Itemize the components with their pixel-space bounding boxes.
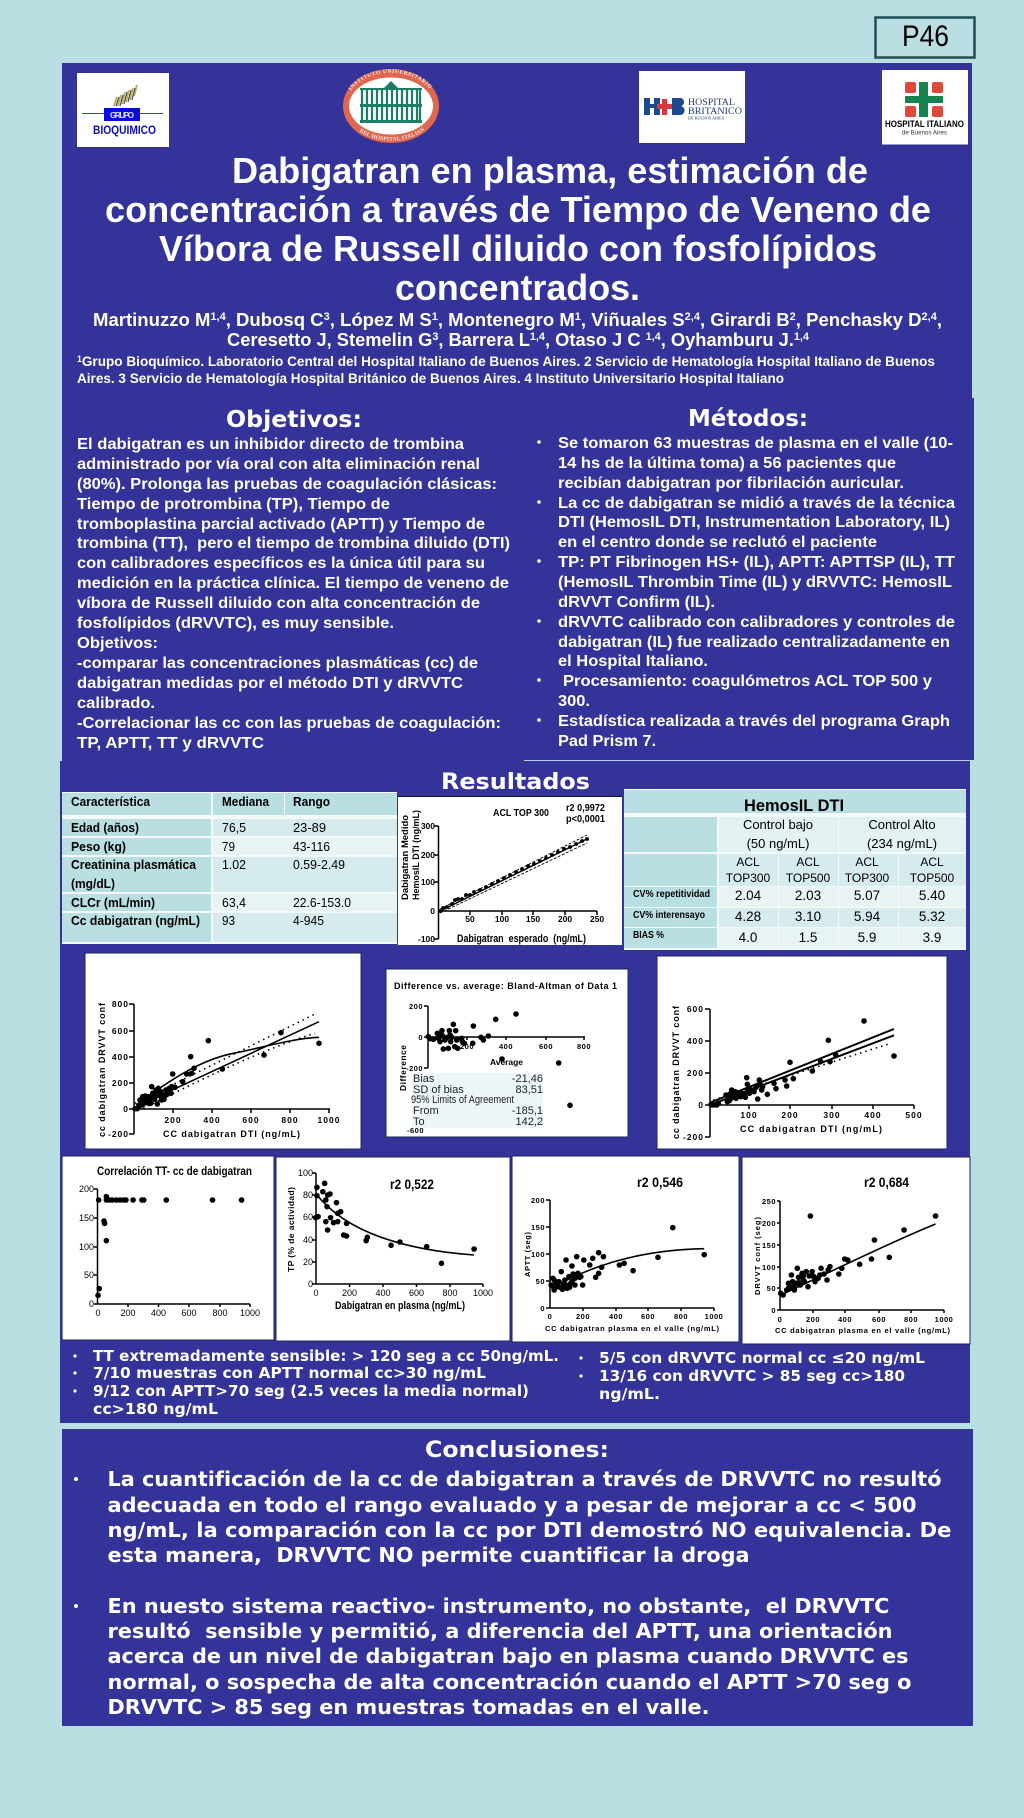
affiliations: Aires. 3 Servicio de Hematología Hospital Británico de Buenos Aires. 4 Instituto Universitario Hospital Italiano [77, 370, 784, 386]
table: HemosIL DTI: Control Alto [868, 817, 936, 832]
table: patient characteristics: 43-116 [293, 839, 330, 854]
authors: 2,4 [922, 311, 938, 323]
authors: 1,4 [646, 331, 662, 343]
text: objetivos body: (80%). Prolonga las pruebas de coagulación clásicas: [77, 476, 497, 493]
text: metodos bullets: Pad Prism 7. [558, 733, 656, 750]
title: Víbora de Russell diluido con fosfolípidos [159, 228, 877, 269]
chart: Bland-Altman: 200 [460, 1042, 474, 1051]
chart: TT correlation: 800 [212, 1308, 228, 1318]
table: HemosIL DTI: ACL [855, 855, 879, 869]
chart: APTT vs dabigatran: 50 [536, 1277, 545, 1286]
logo: Hospital Britanico: BRITANICO [688, 107, 742, 117]
chart: DRVVT vs DTI up to 500: cc dabigatran DRVVT conf [671, 1005, 681, 1139]
chart: TP vs dabigatran: 100 [298, 1168, 313, 1178]
text: objetivos body: víbora de Russell diluido con alta concentración de [77, 595, 480, 612]
table: patient characteristics: Peso (kg) [71, 839, 126, 854]
text: results bullets right: 13/16 con dRVVTC > 85 seg cc>180 [599, 1367, 905, 1385]
text: conclusion 2: normal, o sospecha de alta concentración cuando el APTT >70 seg o [108, 1670, 911, 1694]
chart: DRVVT conf vs dabigatran: r2 0,684 [864, 1174, 909, 1190]
authors: , Viñuales S [581, 309, 685, 330]
chart: TT correlation: 600 [181, 1308, 197, 1318]
table: patient characteristics: Rango [293, 794, 330, 809]
chart: DRVVT conf vs dabigatran: 100 [762, 1263, 776, 1272]
text: objetivos body: -Correlacionar las cc con las pruebas de coagulación: [77, 715, 501, 732]
authors: , [937, 309, 942, 330]
authors: Ceresetto J, Stemelin G [227, 329, 435, 350]
logo: Grupo Bioquimico: GRUPO [110, 111, 134, 120]
text: conclusion 1: La cuantificación de la cc de dabigatran a través de DRVVTC no resultó [108, 1467, 942, 1491]
chart: APTT vs dabigatran: 0 [540, 1304, 545, 1313]
chart: TT correlation: 100 [79, 1242, 94, 1252]
table: patient characteristics: 23-89 [293, 820, 326, 835]
chart: Bland-Altman: -200 [406, 1064, 423, 1073]
chart: ACL TOP 300 calibration: 200 [421, 850, 435, 860]
logo: Instituto Universitario [343, 69, 439, 143]
table: patient characteristics: Creatinina plasmática [71, 857, 197, 872]
authors: , Oyhamburu J. [661, 329, 794, 350]
table: patient characteristics: 63,4 [222, 895, 246, 910]
panel: conclusiones [62, 1429, 973, 1726]
logo: Grupo Bioquimico: BIOQUIMICO [93, 123, 156, 137]
authors: 2,4 [685, 311, 701, 323]
poster code badge: P46 [902, 20, 949, 53]
chart: DRVVT vs DTI full range: 800 [281, 1115, 299, 1125]
table: HemosIL DTI: ACL [920, 855, 944, 869]
table: patient characteristics: 1.02 [222, 857, 246, 872]
chart: TT correlation: 0 [89, 1299, 94, 1309]
authors: 1 [432, 311, 438, 323]
chart: Bland-Altman: 400 [499, 1042, 513, 1051]
text: conclusion 1: ng/mL, la comparación con la cc por DTI demostró NO equivalencia. De [108, 1518, 952, 1542]
chart: DRVVT conf vs dabigatran: 400 [838, 1315, 852, 1324]
chart: DRVVT conf vs dabigatran: 200 [762, 1219, 776, 1228]
table: patient characteristics [62, 792, 397, 944]
chart: DRVVT vs DTI up to 500: 200 [781, 1110, 799, 1120]
text: results bullets left: 9/12 con APTT>70 seg (2.5 veces la media normal) [93, 1382, 529, 1400]
logo: Hospital Italiano [882, 70, 968, 144]
table: Bland-Altman statistics [411, 1073, 543, 1128]
authors: , Girardi B [700, 309, 790, 330]
chart: DRVVT vs DTI full range: 1000 [318, 1115, 340, 1125]
chart: TP vs dabigatran: 400 [375, 1288, 391, 1298]
chart: TP vs dabigatran: 0 [308, 1279, 313, 1289]
chart: TP vs dabigatran: TP (% de actividad) [286, 1187, 296, 1272]
text: objetivos body: calibrado. [77, 695, 155, 712]
text: metodos bullets: Se tomaron 63 muestras de plasma en el valle (10- [558, 435, 953, 452]
logo: Hospital Italiano: HOSPITAL ITALIANO [885, 119, 964, 129]
chart: APTT vs dabigatran: 600 [641, 1312, 655, 1321]
chart: TT correlation: 200 [120, 1308, 136, 1318]
logo: Instituto Universitario: INSTITUTO UNIVERSITARIO [348, 69, 432, 91]
table: HemosIL DTI: CV% interensayo [633, 910, 705, 921]
chart: DRVVT conf vs dabigatran: 50 [767, 1284, 776, 1293]
chart: TT correlation: 200 [79, 1184, 94, 1194]
chart: DRVVT conf vs dabigatran: 150 [762, 1241, 776, 1250]
table: HemosIL DTI [624, 789, 966, 950]
text: metodos bullets: DTI (HemosIL DTI, Instrumentation Laboratory, IL) [558, 514, 950, 531]
chart: APTT vs dabigatran: 400 [609, 1312, 623, 1321]
chart: ACL TOP 300 calibration: 100 [495, 914, 509, 924]
text: metodos bullets [537, 435, 956, 750]
text: objetivos body [77, 436, 510, 752]
chart: ACL TOP 300 calibration: HemosIL DTI (ng/mL) [411, 810, 421, 900]
table: HemosIL DTI: 3.9 [923, 930, 941, 945]
chart: APTT vs dabigatran: CC dabigatran plasma en el valle (ng/mL) [545, 1324, 720, 1333]
text: metodos bullets: (HemosIL Thrombin Time (IL) y dRVVTC: HemosIL [558, 574, 952, 591]
chart: ACL TOP 300 calibration: Dabigatran esperado (ng/mL) [457, 933, 586, 945]
logo: Hospital Italiano: de Buenos Aires [902, 130, 947, 136]
text: metodos bullets: el Hospital Italiano. [558, 653, 708, 670]
text: objetivos body: TP, APTT, TT y dRVVTC [77, 735, 264, 752]
authors: 2 [790, 311, 796, 323]
table: patient characteristics: 22.6-153.0 [293, 895, 351, 910]
table: HemosIL DTI: 1.5 [799, 930, 817, 945]
text: conclusion 1 [74, 1467, 952, 1567]
text: metodos bullets: dabigatran (IL) fue realizado centralizadamente en [558, 634, 950, 651]
chart: TP vs dabigatran: r2 0,522 [390, 1176, 434, 1192]
affiliations: Grupo Bioquímico. Laboratorio Central del Hospital Italiano de Buenos Aires. 2 Servicio de Hematología Hospital Italiano de Buenos [82, 353, 935, 369]
text: metodos bullets: Estadística realizada a través del programa Graph [558, 713, 950, 730]
chart: DRVVT vs DTI up to 500: 600 [687, 1004, 704, 1014]
table: HemosIL DTI: 3.10 [795, 909, 821, 924]
chart: TT correlation: 0 [95, 1308, 101, 1318]
chart: DRVVT vs DTI full range [85, 953, 361, 1149]
authors: , López M S [330, 309, 432, 330]
chart: ACL TOP 300 calibration: 0 [430, 906, 435, 916]
text: objetivos body: dabigatran medidas por el método DTI y dRVVTC [77, 675, 463, 692]
authors: Martinuzzo M [93, 309, 210, 330]
chart: TP vs dabigatran: 60 [303, 1212, 313, 1222]
table: HemosIL DTI: Control bajo [743, 817, 813, 832]
table: patient characteristics: 76,5 [222, 820, 246, 835]
chart: APTT vs dabigatran: 200 [531, 1196, 545, 1205]
authors: 1,4 [794, 331, 810, 343]
affiliations: 1 [77, 354, 82, 364]
text: results bullets left [73, 1347, 559, 1418]
table: HemosIL DTI: 5.07 [854, 888, 880, 903]
text: objetivos body: trombina (TT), pero el tiempo de trombina diluido (DTI) [77, 535, 510, 552]
chart: DRVVT vs DTI up to 500: 400 [687, 1036, 704, 1046]
table: patient characteristics: 79 [222, 839, 235, 854]
text: metodos bullets: en el centro donde se reclutó el paciente [558, 534, 877, 551]
chart: TP vs dabigatran: 80 [303, 1190, 313, 1200]
chart: DRVVT vs DTI up to 500: 400 [864, 1110, 882, 1120]
table: HemosIL DTI: (234 ng/mL) [867, 836, 937, 851]
text: results bullets right [579, 1349, 925, 1403]
chart: Bland-Altman: Average [490, 1057, 523, 1067]
chart: DRVVT vs DTI full range: CC dabigatran DTI (ng/mL) [163, 1129, 300, 1139]
poster code badge [876, 18, 974, 58]
table: HemosIL DTI: HemosIL DTI [744, 796, 844, 815]
text: objetivos body: -comparar las concentraciones plasmáticas (cc) de [77, 655, 478, 672]
chart: DRVVT vs DTI full range: 200 [164, 1115, 182, 1125]
logo: Hospital Britanico: DE BUENOS AIRES [688, 116, 724, 120]
chart: DRVVT vs DTI full range: 400 [112, 1052, 129, 1062]
chart: Bland-Altman [386, 969, 628, 1137]
heading: metodos: Métodos: [688, 404, 808, 432]
chart: Bland-Altman: 800 [577, 1042, 591, 1051]
text: results bullets right: ng/mL. [599, 1385, 660, 1403]
chart: APTT vs dabigatran: 0 [548, 1312, 552, 1321]
chart: TP vs dabigatran [276, 1157, 510, 1341]
chart: DRVVT vs DTI full range: 400 [203, 1115, 221, 1125]
panel: objetivos [62, 398, 524, 762]
chart: TP vs dabigatran: 40 [303, 1235, 313, 1245]
chart: DRVVT vs DTI full range: cc dabigatran DRVVT conf [97, 1002, 107, 1137]
chart: ACL TOP 300 calibration: ACL TOP 300 [493, 808, 549, 819]
text: metodos bullets: Procesamiento: coagulómetros ACL TOP 500 y [563, 673, 932, 690]
table: Bland-Altman statistics: SD of bias [413, 1084, 464, 1096]
chart: DRVVT conf vs dabigatran: 600 [872, 1315, 886, 1324]
chart: DRVVT vs DTI full range: -200 [108, 1129, 129, 1139]
table: patient characteristics: Mediana [222, 794, 270, 809]
table: HemosIL DTI: TOP300 [845, 871, 890, 885]
table: patient characteristics: (mg/dL) [71, 876, 115, 891]
title: concentración a través de Tiempo de Veneno de [105, 189, 931, 230]
chart: ACL TOP 300 calibration: 200 [558, 914, 572, 924]
table: patient characteristics: 4-945 [293, 913, 324, 928]
title: Dabigatran en plasma, estimación de [232, 150, 868, 191]
table: HemosIL DTI: 2.03 [795, 888, 821, 903]
chart: DRVVT vs DTI up to 500: CC dabigatran DTI (ng/mL) [740, 1124, 882, 1134]
table: Bland-Altman statistics: 95% Limits of Agreement [411, 1094, 514, 1106]
authors: 3 [432, 331, 438, 343]
table: HemosIL DTI: CV% repetitividad [633, 889, 710, 900]
table: HemosIL DTI: TOP500 [910, 871, 955, 885]
table: patient characteristics: Cc dabigatran (ng/mL) [71, 913, 200, 928]
table: Bland-Altman statistics: 83,51 [515, 1084, 543, 1096]
chart: TP vs dabigatran: 600 [409, 1288, 424, 1298]
text: objetivos body: medición en la práctica clínica. El tiempo de veneno de [77, 575, 509, 592]
text: metodos bullets: 300. [558, 693, 590, 710]
chart: APTT vs dabigatran [512, 1156, 739, 1342]
table: patient characteristics: 0.59-2.49 [293, 857, 345, 872]
table: Bland-Altman statistics: To [413, 1116, 425, 1128]
heading: conclusiones: Conclusiones: [425, 1438, 609, 1463]
chart: APTT vs dabigatran: APTT (seg) [523, 1232, 532, 1277]
panel: metodos [522, 398, 974, 760]
chart: DRVVT vs DTI up to 500 [657, 956, 947, 1149]
chart: APTT vs dabigatran: r2 0,546 [637, 1174, 683, 1190]
table: HemosIL DTI: TOP300 [726, 871, 771, 885]
text: metodos bullets: dRVVTC calibrado con calibradores y controles de [558, 614, 955, 631]
logo: Hospital Britanico [639, 71, 745, 143]
authors: , Otaso J C [545, 329, 646, 350]
table: HemosIL DTI: 5.94 [854, 909, 881, 924]
heading: resultados: Resultados [441, 770, 590, 795]
text: objetivos body: Tiempo de protrombina (TP), Tiempo de [77, 496, 390, 513]
authors: , Penchasky D [796, 309, 922, 330]
chart: ACL TOP 300 calibration: -100 [418, 934, 435, 944]
text: conclusion 2: DRVVTC > 85 seg en muestras tomadas en el valle. [108, 1695, 710, 1719]
chart: ACL TOP 300 calibration: p<0,0001 [566, 814, 605, 825]
chart: ACL TOP 300 calibration: Dabigatran Medido [400, 814, 410, 900]
chart: DRVVT conf vs dabigatran: 800 [904, 1315, 918, 1324]
chart: DRVVT vs DTI up to 500: 100 [740, 1110, 758, 1120]
chart: DRVVT conf vs dabigatran: 0 [778, 1315, 782, 1324]
table: patient characteristics: Característica [71, 794, 151, 809]
chart: DRVVT vs DTI full range: 0 [123, 1104, 129, 1114]
logo: Hospital Britanico: HOSPITAL [688, 98, 735, 108]
table: HemosIL DTI: 4.0 [739, 930, 757, 945]
chart: ACL TOP 300 calibration: 50 [465, 914, 475, 924]
chart: TT correlation: Correlación TT- cc de dabigatran [97, 1164, 252, 1178]
chart: Bland-Altman: Difference [398, 1045, 408, 1091]
text: metodos bullets: TP: PT Fibrinogen HS+ (IL), APTT: APTTSP (IL), TT [558, 554, 956, 571]
authors: , Barrera L [438, 329, 530, 350]
table: HemosIL DTI: 4.28 [735, 909, 761, 924]
text: metodos bullets: recibían dabigatran por fibrilación auricular. [558, 475, 904, 492]
table: HemosIL DTI: BIAS % [633, 930, 664, 941]
chart: Bland-Altman: Difference vs. average: Bland-Altman of Data 1 [394, 981, 617, 991]
table: HemosIL DTI: TOP500 [786, 871, 831, 885]
chart: TT correlation: 400 [151, 1308, 166, 1318]
logo: Grupo Bioquimico [77, 73, 169, 147]
chart: DRVVT conf vs dabigatran: 250 [762, 1197, 776, 1206]
chart: DRVVT vs DTI up to 500: 200 [687, 1068, 704, 1078]
text: objetivos body: tromboplastina parcial activado (APTT) y Tiempo de [77, 516, 485, 533]
table: patient characteristics: 93 [222, 913, 235, 928]
authors: 1,4 [210, 311, 227, 323]
text: objetivos body: Objetivos: [77, 635, 158, 652]
chart: ACL TOP 300 calibration: 150 [526, 914, 540, 924]
text: conclusion 1: adecuada en todo el rango evaluado y a pesar de mejorar a cc < 500 [108, 1493, 917, 1517]
authors: , Montenegro M [438, 309, 575, 330]
chart: DRVVT conf vs dabigatran: 0 [771, 1306, 776, 1315]
chart: DRVVT conf vs dabigatran: CC dabigatran plasma en el valle (ng/mL) [775, 1326, 950, 1335]
text: conclusion 1: esta manera, DRVVTC NO permite cuantificar la droga [108, 1543, 750, 1567]
table: HemosIL DTI: ACL [796, 855, 820, 869]
chart: DRVVT vs DTI up to 500: -200 [683, 1132, 704, 1142]
table: HemosIL DTI: 5.32 [919, 909, 945, 924]
chart: DRVVT vs DTI full range: 600 [112, 1026, 129, 1036]
text: results bullets left: 7/10 muestras con APTT normal cc>30 ng/mL [93, 1364, 486, 1382]
chart: TT correlation [62, 1156, 274, 1340]
text: conclusion 2: resultó sensible y permitió, a diferencia del APTT, una orientación [108, 1619, 892, 1643]
chart: DRVVT conf vs dabigatran: 1000 [935, 1315, 953, 1324]
chart: TP vs dabigatran: 1000 [473, 1288, 493, 1298]
chart: APTT vs dabigatran: 200 [576, 1312, 590, 1321]
chart: DRVVT vs DTI up to 500: 0 [698, 1100, 704, 1110]
heading: objetivos: Objetivos: [226, 405, 362, 433]
chart: Bland-Altman: 600 [539, 1042, 553, 1051]
text: objetivos body: El dabigatran es un inhibidor directo de trombina [77, 436, 464, 453]
chart: TP vs dabigatran: 200 [342, 1288, 357, 1298]
chart: TT correlation: 1000 [240, 1308, 260, 1318]
authors: 1,4 [530, 331, 546, 343]
title: concentrados. [395, 267, 640, 308]
chart: DRVVT conf vs dabigatran: DRVVT conf (seg) [753, 1216, 762, 1295]
text: metodos bullets: La cc de dabigatran se midió a través de la técnica [558, 495, 955, 512]
chart: Bland-Altman: 0 [418, 1033, 423, 1042]
table: Bland-Altman statistics: -185,1 [512, 1105, 543, 1117]
table: HemosIL DTI: 5.40 [919, 888, 945, 903]
table: Bland-Altman statistics: 142,2 [515, 1116, 543, 1128]
chart: ACL TOP 300 calibration [398, 796, 622, 945]
chart: TP vs dabigatran: 800 [442, 1288, 458, 1298]
chart: DRVVT conf vs dabigatran [742, 1157, 970, 1344]
text: conclusion 2 [74, 1594, 911, 1719]
authors: , Dubosq C [226, 309, 324, 330]
table: HemosIL DTI: 5.9 [858, 930, 876, 945]
text: results bullets left: TT extremadamente sensible: > 120 seg a cc 50ng/mL. [93, 1347, 559, 1365]
title [105, 150, 931, 308]
authors: 1 [575, 311, 581, 323]
chart: TT correlation: 150 [79, 1213, 94, 1223]
text: results bullets right: 5/5 con dRVVTC normal cc ≤20 ng/mL [599, 1349, 925, 1367]
panel: resultados [60, 760, 970, 1423]
table: patient characteristics: Edad (años) [71, 820, 139, 835]
text: metodos bullets: dRVVT Confirm (IL). [558, 594, 715, 611]
chart: ACL TOP 300 calibration: 300 [421, 821, 435, 831]
text: objetivos body: administrado por vía oral con alta eliminación renal [77, 456, 480, 473]
chart: TP vs dabigatran: 0 [313, 1288, 319, 1298]
chart: TT correlation: 50 [84, 1270, 94, 1280]
table: HemosIL DTI: (50 ng/mL) [747, 836, 809, 851]
table: HemosIL DTI: 2.04 [735, 888, 762, 903]
chart: ACL TOP 300 calibration: 250 [590, 914, 604, 924]
chart: ACL TOP 300 calibration: 100 [421, 877, 435, 887]
affiliations [77, 353, 935, 386]
table: patient characteristics: CLCr (mL/min) [71, 895, 155, 910]
chart: APTT vs dabigatran: 150 [531, 1223, 545, 1232]
chart: Bland-Altman: -600 [407, 1126, 424, 1135]
authors [93, 309, 942, 350]
table: Bland-Altman statistics: -21,46 [512, 1073, 543, 1085]
chart: DRVVT vs DTI full range: 200 [112, 1078, 129, 1088]
chart: ACL TOP 300 calibration: r2 0,9972 [566, 803, 605, 814]
chart: TP vs dabigatran: Dabigatran en plasma (ng/mL) [335, 1300, 465, 1312]
table: Bland-Altman statistics: Bias [413, 1073, 435, 1085]
text: conclusion 2: En nuesto sistema reactivo- instrumento, no obstante, el DRVVTC [108, 1594, 890, 1618]
text: results bullets left: cc>180 ng/mL [93, 1400, 218, 1418]
chart: APTT vs dabigatran: 100 [531, 1250, 545, 1259]
authors: 3 [324, 311, 330, 323]
chart: DRVVT conf vs dabigatran: 200 [806, 1315, 820, 1324]
text: objetivos body: fosfolípidos (dRVVTC), es muy sensible. [77, 615, 394, 632]
chart: APTT vs dabigatran: 1000 [705, 1312, 723, 1321]
chart: DRVVT vs DTI full range: 600 [242, 1115, 260, 1125]
chart: APTT vs dabigatran: 800 [674, 1312, 688, 1321]
text: conclusion 2: acerca de un nivel de dabigatran bajo en plasma cuando DRVVTC es [108, 1644, 908, 1668]
chart: DRVVT vs DTI up to 500: 500 [905, 1110, 923, 1120]
table: HemosIL DTI: ACL [736, 855, 760, 869]
text: metodos bullets: 14 hs de la última toma) a 56 pacientes que [558, 455, 896, 472]
panel: header [62, 63, 972, 398]
chart: Bland-Altman: 200 [409, 1002, 423, 1011]
chart: TP vs dabigatran: 20 [303, 1257, 313, 1267]
text: objetivos body: con calibradores específicos es la única útil para su [77, 555, 485, 572]
chart: DRVVT vs DTI full range: 800 [112, 999, 129, 1009]
table: Bland-Altman statistics: From [413, 1105, 439, 1117]
chart: DRVVT vs DTI up to 500: 300 [823, 1110, 841, 1120]
